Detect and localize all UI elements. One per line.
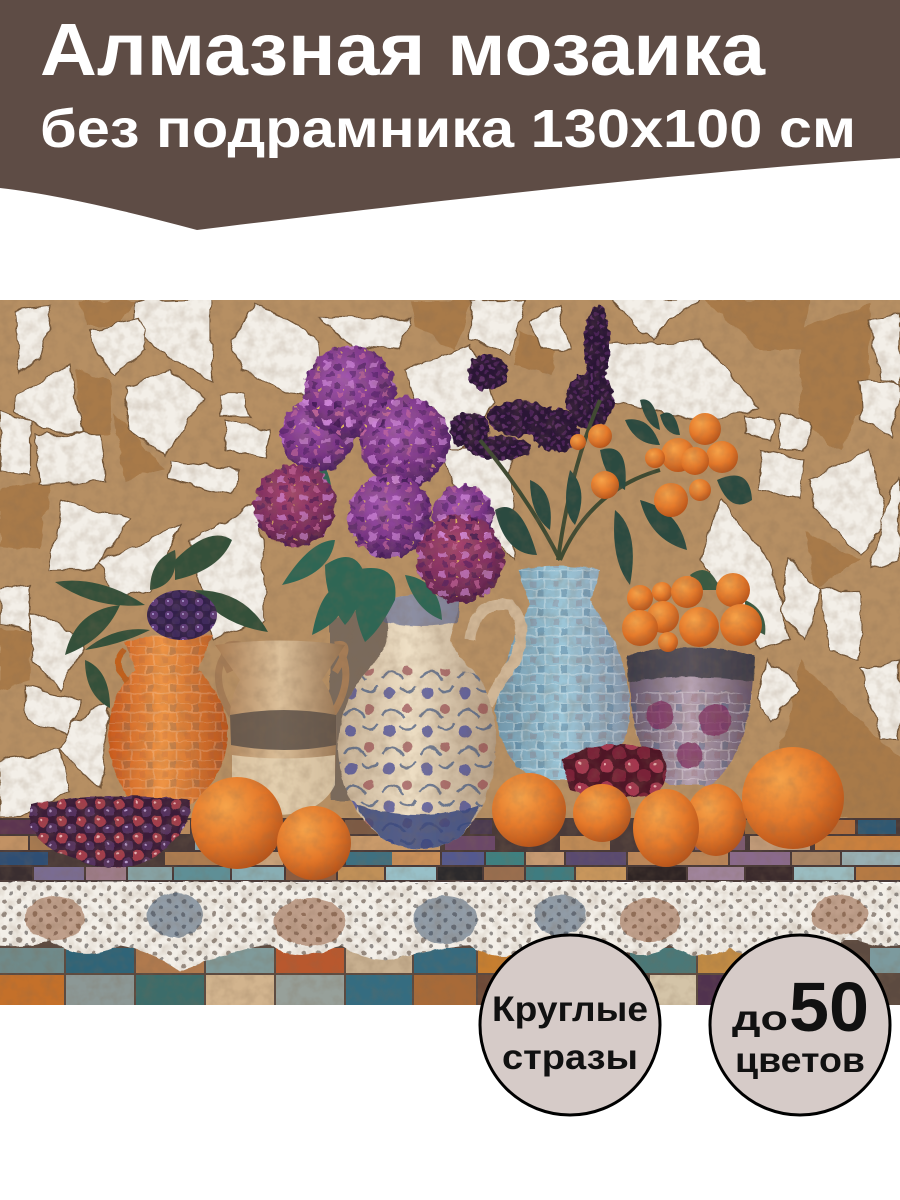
table front tiles: [0, 940, 900, 1005]
grapes on table: [30, 744, 666, 868]
orange jug: [108, 634, 228, 805]
orange branch and leaves: [480, 399, 752, 585]
stone wall: [0, 290, 900, 840]
badge: up to 50 colours: [710, 935, 890, 1115]
tan two-handled jar: [215, 640, 346, 815]
grapes leaves on jug: [55, 536, 268, 708]
painting: still life: [0, 290, 900, 1005]
badge: up to 50 colours: 50: [789, 968, 869, 1046]
oranges on table: [191, 747, 844, 880]
badge: round rhinestones: [480, 935, 660, 1115]
subtitle: без подрамника 130х100 см: [40, 99, 856, 159]
tiled bowl: [627, 648, 755, 785]
oranges in bowl: [622, 570, 765, 652]
badge: up to 50 colours: до: [732, 999, 788, 1038]
header banner: [0, 0, 900, 230]
badge: up to 50 colours: цветов: [735, 1041, 865, 1080]
badge: round rhinestones: Круглые: [492, 990, 648, 1029]
blue mosaic vase: [495, 566, 630, 780]
hydrangea leaves: [282, 455, 442, 642]
hydrangea blooms: [254, 346, 504, 602]
table top tiles: [0, 818, 900, 882]
large floral pitcher: [338, 595, 521, 849]
title: Алмазная мозаика: [40, 8, 766, 91]
lace tablecloth: [0, 882, 900, 972]
dark purple flower sprigs: [450, 305, 614, 460]
badge: round rhinestones: стразы: [502, 1038, 638, 1077]
paint texture overlay: [0, 300, 900, 1005]
